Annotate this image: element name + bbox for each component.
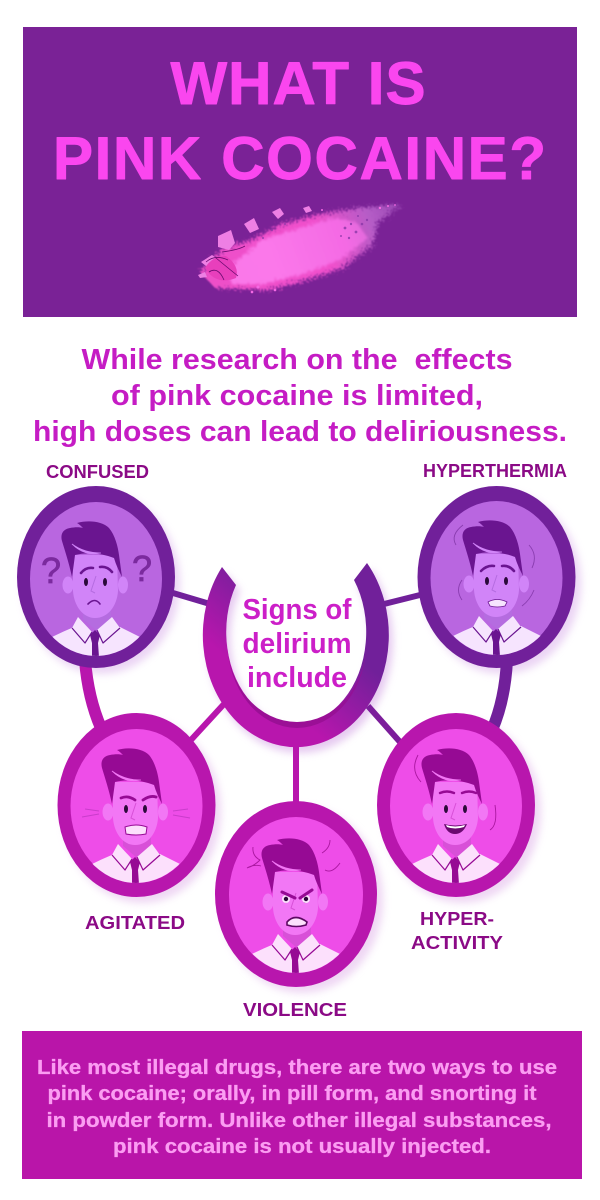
hub label: delirium [242, 628, 352, 660]
circle: hyperactivity [377, 713, 535, 897]
expression: agitated [121, 796, 156, 800]
connectors between circles and hub [85, 593, 507, 805]
title: WHAT IS [170, 50, 426, 117]
label: hyperactivity: ACTIVITY [411, 933, 503, 953]
hub label: Signs of [242, 594, 352, 626]
label: violence: VIOLENCE [243, 1000, 347, 1020]
hub label: include [247, 662, 347, 694]
circle: confused [17, 486, 175, 668]
title [53, 50, 546, 192]
label: hyperactivity: HYPER- [420, 909, 494, 929]
hub: signs of delirium [203, 563, 389, 747]
tension lines [82, 809, 190, 818]
footer text: in powder form. Unlike other illegal substances, [46, 1110, 552, 1132]
motion lines [415, 755, 496, 830]
label: confused: CONFUSED [46, 462, 149, 482]
soft shadows behind circles and hub [22, 492, 581, 993]
anger marks [247, 840, 340, 871]
expression: sweating [481, 566, 514, 571]
title: PINK COCAINE? [53, 125, 546, 192]
question marks [41, 548, 152, 591]
footer text: pink cocaine; orally, in pill form, and snorting it [48, 1083, 537, 1105]
icon: pink powder [198, 204, 402, 293]
circle: hyperthermia [418, 486, 576, 668]
circle: violence [215, 801, 377, 987]
label: hyperthermia: HYPERTHERMIA [423, 461, 567, 481]
panel: header [23, 27, 577, 317]
subtitle text: While research on the effects [82, 344, 512, 376]
panel: footer [22, 1031, 582, 1179]
expression: angry [282, 890, 312, 926]
question marks: ? [132, 548, 152, 589]
question marks: ? [41, 550, 61, 591]
expression: worried [81, 567, 112, 604]
footer text: Like most illegal drugs, there are two ways to use [37, 1057, 557, 1079]
labels [46, 461, 567, 1020]
circle: agitated [58, 713, 216, 897]
label: hyperactivity [411, 909, 503, 953]
label: agitated: AGITATED [85, 913, 185, 933]
hub label [242, 594, 352, 694]
expression: smiling [440, 792, 476, 793]
subtitle text: high doses can lead to deliriousness. [33, 416, 567, 448]
subtitle text: of pink cocaine is limited, [111, 380, 483, 412]
sweat lines [454, 525, 534, 606]
footer text [37, 1057, 557, 1158]
subtitle text [33, 344, 567, 448]
footer text: pink cocaine is not usually injected. [113, 1136, 491, 1158]
powder grains [262, 215, 368, 239]
